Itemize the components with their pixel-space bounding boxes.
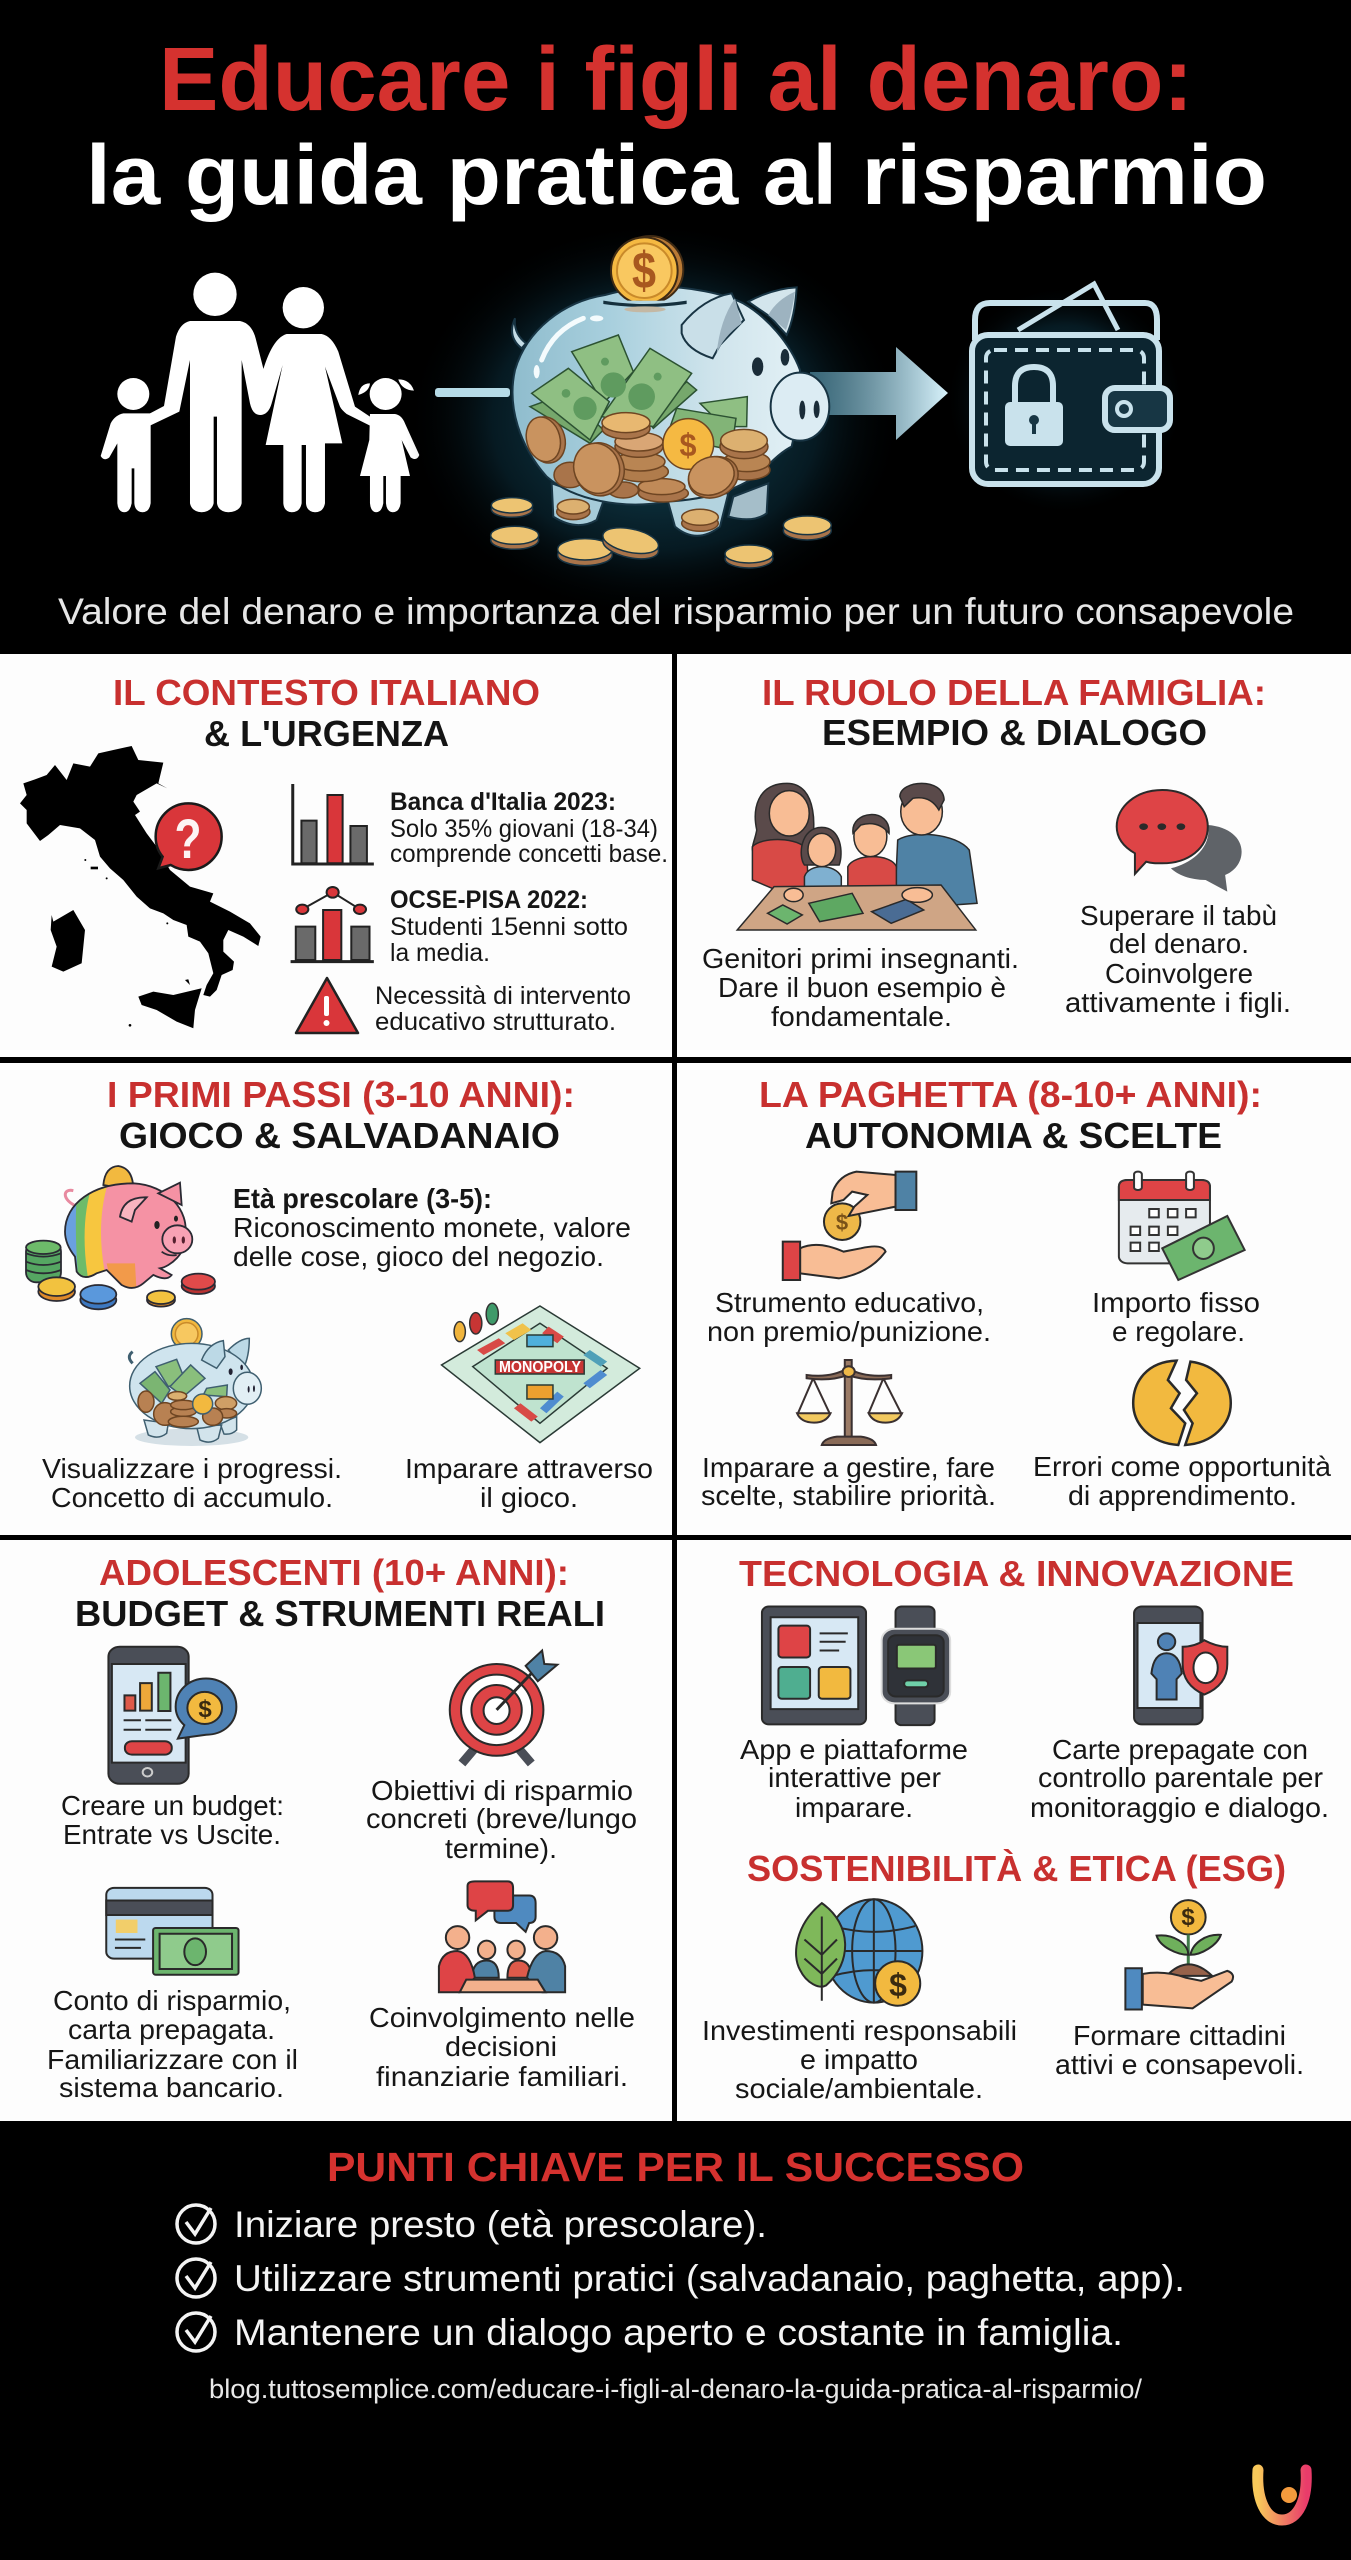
- icon: warning triangle: [296, 978, 358, 1033]
- icon: plant in hand: [1125, 1900, 1233, 2010]
- heading: BUDGET & STRUMENTI REALI: [75, 1593, 605, 1634]
- icon: globe with leaf and coin: $: [889, 1967, 907, 2003]
- subtitle: Valore del denaro e importanza del risparmio per un futuro consapevole: [58, 591, 1294, 632]
- text: investimenti: [702, 2015, 1017, 2104]
- icon: bar chart: [293, 784, 374, 864]
- text: eta prescolare: [233, 1183, 631, 1272]
- icon: hands and coin: $: [836, 1210, 848, 1235]
- heading: tecnologia: TECNOLOGIA & INNOVAZIONE: [739, 1553, 1294, 1594]
- text: errori: Errori come opportunità: [1033, 1451, 1331, 1482]
- heading: & L'URGENZA: [204, 713, 449, 754]
- arrow: family to piggy: [435, 388, 510, 397]
- text: genitori: Genitori primi insegnanti.: [702, 943, 1019, 974]
- icon: question bubble: ?: [174, 807, 202, 870]
- text: app: imparare.: [795, 1792, 913, 1823]
- text: visualizzare: Visualizzare i progressi.: [42, 1453, 342, 1484]
- text: investimenti: e impatto: [800, 2044, 918, 2075]
- icon: wallet with padlock: [972, 284, 1170, 484]
- text: app: [740, 1734, 968, 1823]
- icon: monopoly board: MONOPOLY: [499, 1359, 581, 1376]
- panel: tecnologia e sostenibilita: [677, 1540, 1351, 2121]
- text: genitori: Dare il buon esempio è: [718, 972, 1006, 1003]
- icon: rainbow piggy bank: [26, 1166, 215, 1309]
- text: strumento: [707, 1287, 991, 1347]
- icon: hands and coin: [783, 1172, 916, 1280]
- glow behind wallet: [945, 285, 1185, 515]
- text: source url: blog.tuttosemplice.com/educare-i-figli-al-denaro-la-guida-pratica-al-risparmio/: [209, 2374, 1143, 2404]
- panel: adolescenti: [0, 1540, 672, 2121]
- text: point 1: Iniziare presto (età prescolare).: [234, 2204, 767, 2245]
- text: creare budget: Creare un budget:: [61, 1790, 284, 1821]
- text: Banca d'Italia: comprende concetti base.: [390, 840, 668, 868]
- icon: globe with leaf and coin: [796, 1899, 922, 2006]
- title: Educare i figli al denaro:: [159, 30, 1193, 130]
- text: Banca d'Italia: Banca d'Italia 2023:: [390, 788, 616, 816]
- text: importo: Importo fisso: [1092, 1287, 1260, 1318]
- text: eta prescolare: Età prescolare (3-5):: [233, 1183, 492, 1214]
- heading: [762, 672, 1266, 753]
- text: obiettivi: [366, 1775, 637, 1864]
- text: OCSE-PISA: la media.: [390, 939, 490, 967]
- text: Banca d'Italia: [390, 788, 668, 868]
- icon: glass piggy bank: [491, 236, 831, 568]
- heading: GIOCO & SALVADANAIO: [119, 1115, 560, 1156]
- text: obiettivi: Obiettivi di risparmio: [371, 1775, 633, 1806]
- icon: question bubble: [156, 803, 222, 870]
- heading: ESEMPIO & DIALOGO: [822, 712, 1207, 753]
- text: necessita: educativo strutturato.: [375, 1008, 616, 1036]
- text: conto: sistema bancario.: [59, 2072, 284, 2103]
- text: genitori: [702, 943, 1019, 1032]
- icon: phone with parental control: [1134, 1607, 1227, 1724]
- icon: card and banknote: [106, 1888, 239, 1975]
- text: tabu: del denaro.: [1109, 928, 1249, 959]
- text: imparare: [405, 1453, 653, 1513]
- text: formare: Formare cittadini: [1073, 2020, 1286, 2051]
- panel: punti chiave: [0, 2121, 1351, 2560]
- panel dividers: [0, 654, 1351, 2121]
- icon: check 1: [177, 2205, 215, 2243]
- text: app: App e piattaforme: [740, 1734, 968, 1765]
- text: conto: carta prepagata.: [68, 2014, 275, 2045]
- heading: IL RUOLO DELLA FAMIGLIA:: [762, 672, 1266, 713]
- text: OCSE-PISA: OCSE-PISA 2022:: [390, 886, 588, 914]
- text: conto: Conto di risparmio,: [53, 1985, 291, 2016]
- text: gestire: [701, 1452, 996, 1511]
- icon: target with arrow: [450, 1651, 557, 1763]
- text: importo: [1092, 1287, 1260, 1347]
- text: point 3: Mantenere un dialogo aperto e costante in famiglia.: [234, 2312, 1123, 2353]
- text: tabu: Superare il tabù: [1080, 900, 1277, 931]
- panel: il contesto italiano: [0, 654, 672, 1057]
- header: [58, 44, 1292, 632]
- text: tabu: attivamente i figli.: [1065, 987, 1291, 1018]
- text: eta prescolare: Riconoscimento monete, valore: [233, 1212, 631, 1243]
- text: formare: attivi e consapevoli.: [1055, 2049, 1304, 2080]
- title: [86, 30, 1267, 222]
- text: coinvolgimento: decisioni: [445, 2031, 557, 2062]
- icon: monopoly board: [442, 1303, 640, 1443]
- text: tabu: [1065, 900, 1291, 1018]
- icon: speech bubbles: [1117, 790, 1242, 892]
- title: la guida pratica al risparmio: [86, 128, 1267, 222]
- text: errori: di apprendimento.: [1068, 1480, 1297, 1511]
- text: investimenti: Investimenti responsabili: [702, 2015, 1017, 2046]
- text: tabu: Coinvolgere: [1105, 958, 1253, 989]
- icon: plant in hand: $: [1181, 1904, 1195, 1931]
- text: strumento: non premio/punizione.: [707, 1316, 991, 1347]
- text: app: interattive per: [768, 1762, 941, 1793]
- heading: [75, 1552, 605, 1634]
- text: eta prescolare: delle cose, gioco del negozio.: [233, 1241, 604, 1272]
- icon: check 2: [177, 2259, 215, 2297]
- icon: broken coin: [1133, 1361, 1231, 1445]
- text: gestire: scelte, stabilire priorità.: [701, 1480, 996, 1511]
- text: coinvolgimento: finanziarie familiari.: [376, 2061, 628, 2092]
- heading: ADOLESCENTI (10+ ANNI):: [99, 1552, 569, 1593]
- text: obiettivi: concreti (breve/lungo: [366, 1803, 637, 1834]
- icon: small glass piggy bank: [129, 1319, 261, 1446]
- text: Banca d'Italia: Solo 35% giovani (18-34): [390, 815, 658, 843]
- text: gestire: Imparare a gestire, fare: [702, 1452, 995, 1483]
- text: carte: controllo parentale per: [1038, 1762, 1323, 1793]
- text: necessita: Necessità di intervento: [375, 982, 631, 1010]
- text: visualizzare: [42, 1453, 342, 1513]
- icon: logo: [1258, 2470, 1306, 2520]
- icon: check 3: [177, 2313, 215, 2351]
- glow behind piggy bank: [405, 220, 905, 620]
- text: creare budget: [61, 1790, 284, 1850]
- icon: calendar and banknote: [1119, 1172, 1245, 1280]
- text: formare: [1055, 2020, 1304, 2080]
- text: strumento: Strumento educativo,: [715, 1287, 984, 1318]
- text: point 2: Utilizzare strumenti pratici (salvadanaio, paghetta, app).: [234, 2258, 1185, 2299]
- heading: [759, 1074, 1262, 1156]
- text: conto: Familiarizzare con il: [47, 2044, 298, 2075]
- icon: line and bars: [291, 887, 374, 962]
- text: imparare: il gioco.: [480, 1482, 578, 1513]
- icon: budget phone: [108, 1647, 236, 1784]
- icon: family silhouette: [101, 273, 419, 512]
- icon: balance scale: [797, 1360, 902, 1445]
- heading: [107, 1074, 575, 1156]
- text: creare budget: Entrate vs Uscite.: [63, 1819, 281, 1850]
- heading: LA PAGHETTA (8-10+ ANNI):: [759, 1074, 1262, 1115]
- heading: sostenibilita: SOSTENIBILITÀ & ETICA (ESG): [747, 1848, 1286, 1889]
- text: carte: Carte prepagate con: [1052, 1734, 1308, 1765]
- text: imparare: Imparare attraverso: [405, 1453, 653, 1484]
- text: genitori: fondamentale.: [771, 1001, 952, 1032]
- dollar sign on pile coin: $: [680, 427, 697, 463]
- icon: tablet and smartwatch: [762, 1607, 950, 1725]
- text: necessita: [375, 982, 631, 1036]
- text: visualizzare: Concetto di accumulo.: [51, 1482, 333, 1513]
- heading: PUNTI CHIAVE PER IL SUCCESSO: [327, 2144, 1024, 2190]
- panel: la paghetta: [677, 1063, 1351, 1535]
- arrow: piggy to wallet: [810, 347, 948, 440]
- text: OCSE-PISA: [390, 886, 628, 967]
- text: OCSE-PISA: Studenti 15enni sotto: [390, 913, 628, 941]
- text: investimenti: sociale/ambientale.: [735, 2073, 983, 2104]
- text: errori: [1033, 1451, 1331, 1511]
- text: carte: monitoraggio e dialogo.: [1030, 1792, 1329, 1823]
- panel: il ruolo della famiglia: [677, 654, 1351, 1057]
- panel: i primi passi: [0, 1063, 672, 1535]
- text: importo: e regolare.: [1112, 1316, 1245, 1347]
- text: obiettivi: termine).: [445, 1833, 557, 1864]
- heading: AUTONOMIA & SCELTE: [805, 1115, 1222, 1156]
- text: conto: [47, 1985, 298, 2103]
- heading: I PRIMI PASSI (3-10 ANNI):: [107, 1074, 575, 1115]
- text: coinvolgimento: Coinvolgimento nelle: [369, 2002, 635, 2033]
- text: carte: [1030, 1734, 1329, 1823]
- icon: family at table: [737, 783, 977, 930]
- icon: budget phone: $: [198, 1696, 212, 1723]
- text: coinvolgimento: [369, 2002, 635, 2092]
- heading: [113, 672, 540, 754]
- icon: family discussion: [439, 1881, 565, 1992]
- heading: IL CONTESTO ITALIANO: [113, 672, 540, 713]
- dollar sign on coin: $: [632, 242, 656, 300]
- icon: map of Italy: [20, 746, 261, 1028]
